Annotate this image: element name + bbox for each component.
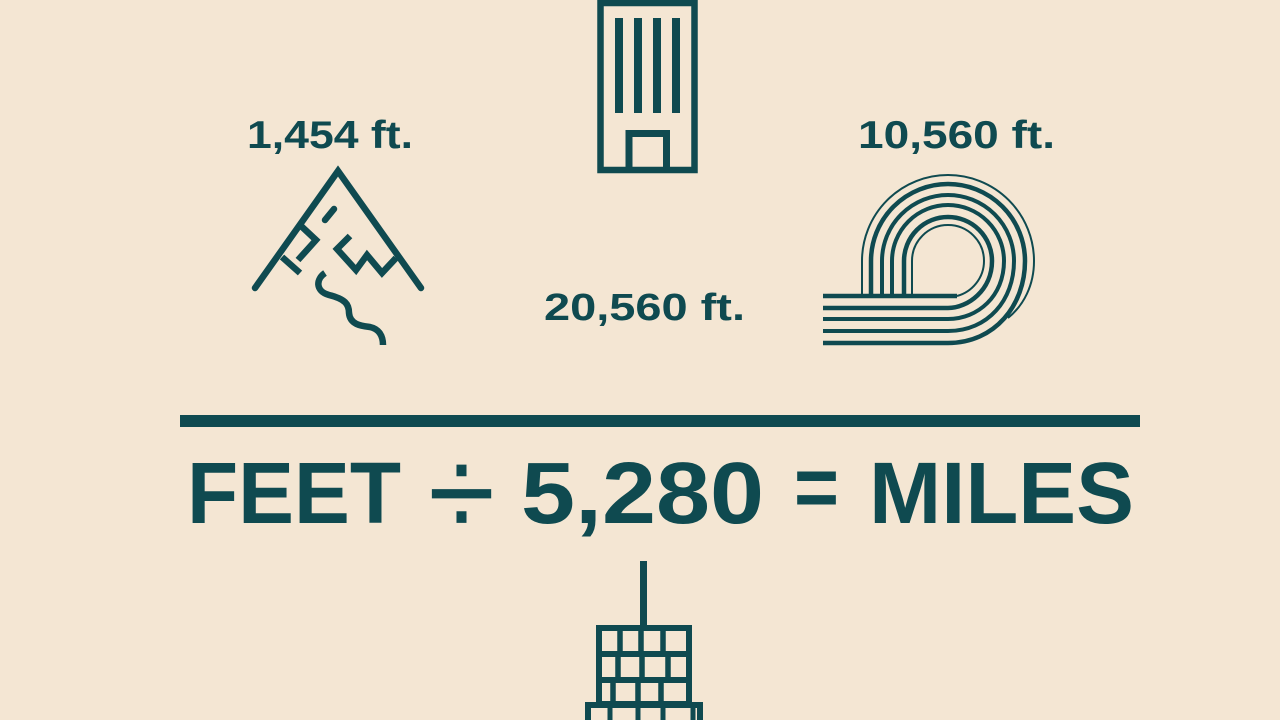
formula: feet divided by 5,280 equals miles: MILES [869, 445, 1134, 542]
label: 20,560 ft.: 20,560 ft. [544, 287, 745, 329]
label: 1,454 ft.: 1,454 ft. [247, 114, 413, 157]
icon: mountain [255, 171, 421, 345]
icon: running track [823, 175, 1034, 343]
formula: feet divided by 5,280 equals miles: 5,280 [521, 445, 764, 542]
formula: feet divided by 5,280 equals miles: = [794, 439, 839, 536]
icon: skyscraper with antenna [588, 561, 700, 720]
icon: office building [600, 3, 694, 170]
formula: feet divided by 5,280 equals miles [187, 419, 1134, 565]
label: 10,560 ft.: 10,560 ft. [858, 114, 1055, 157]
divider line [180, 415, 1140, 427]
formula: feet divided by 5,280 equals miles: ÷ [428, 419, 495, 565]
formula: feet divided by 5,280 equals miles: FEET [187, 445, 401, 542]
